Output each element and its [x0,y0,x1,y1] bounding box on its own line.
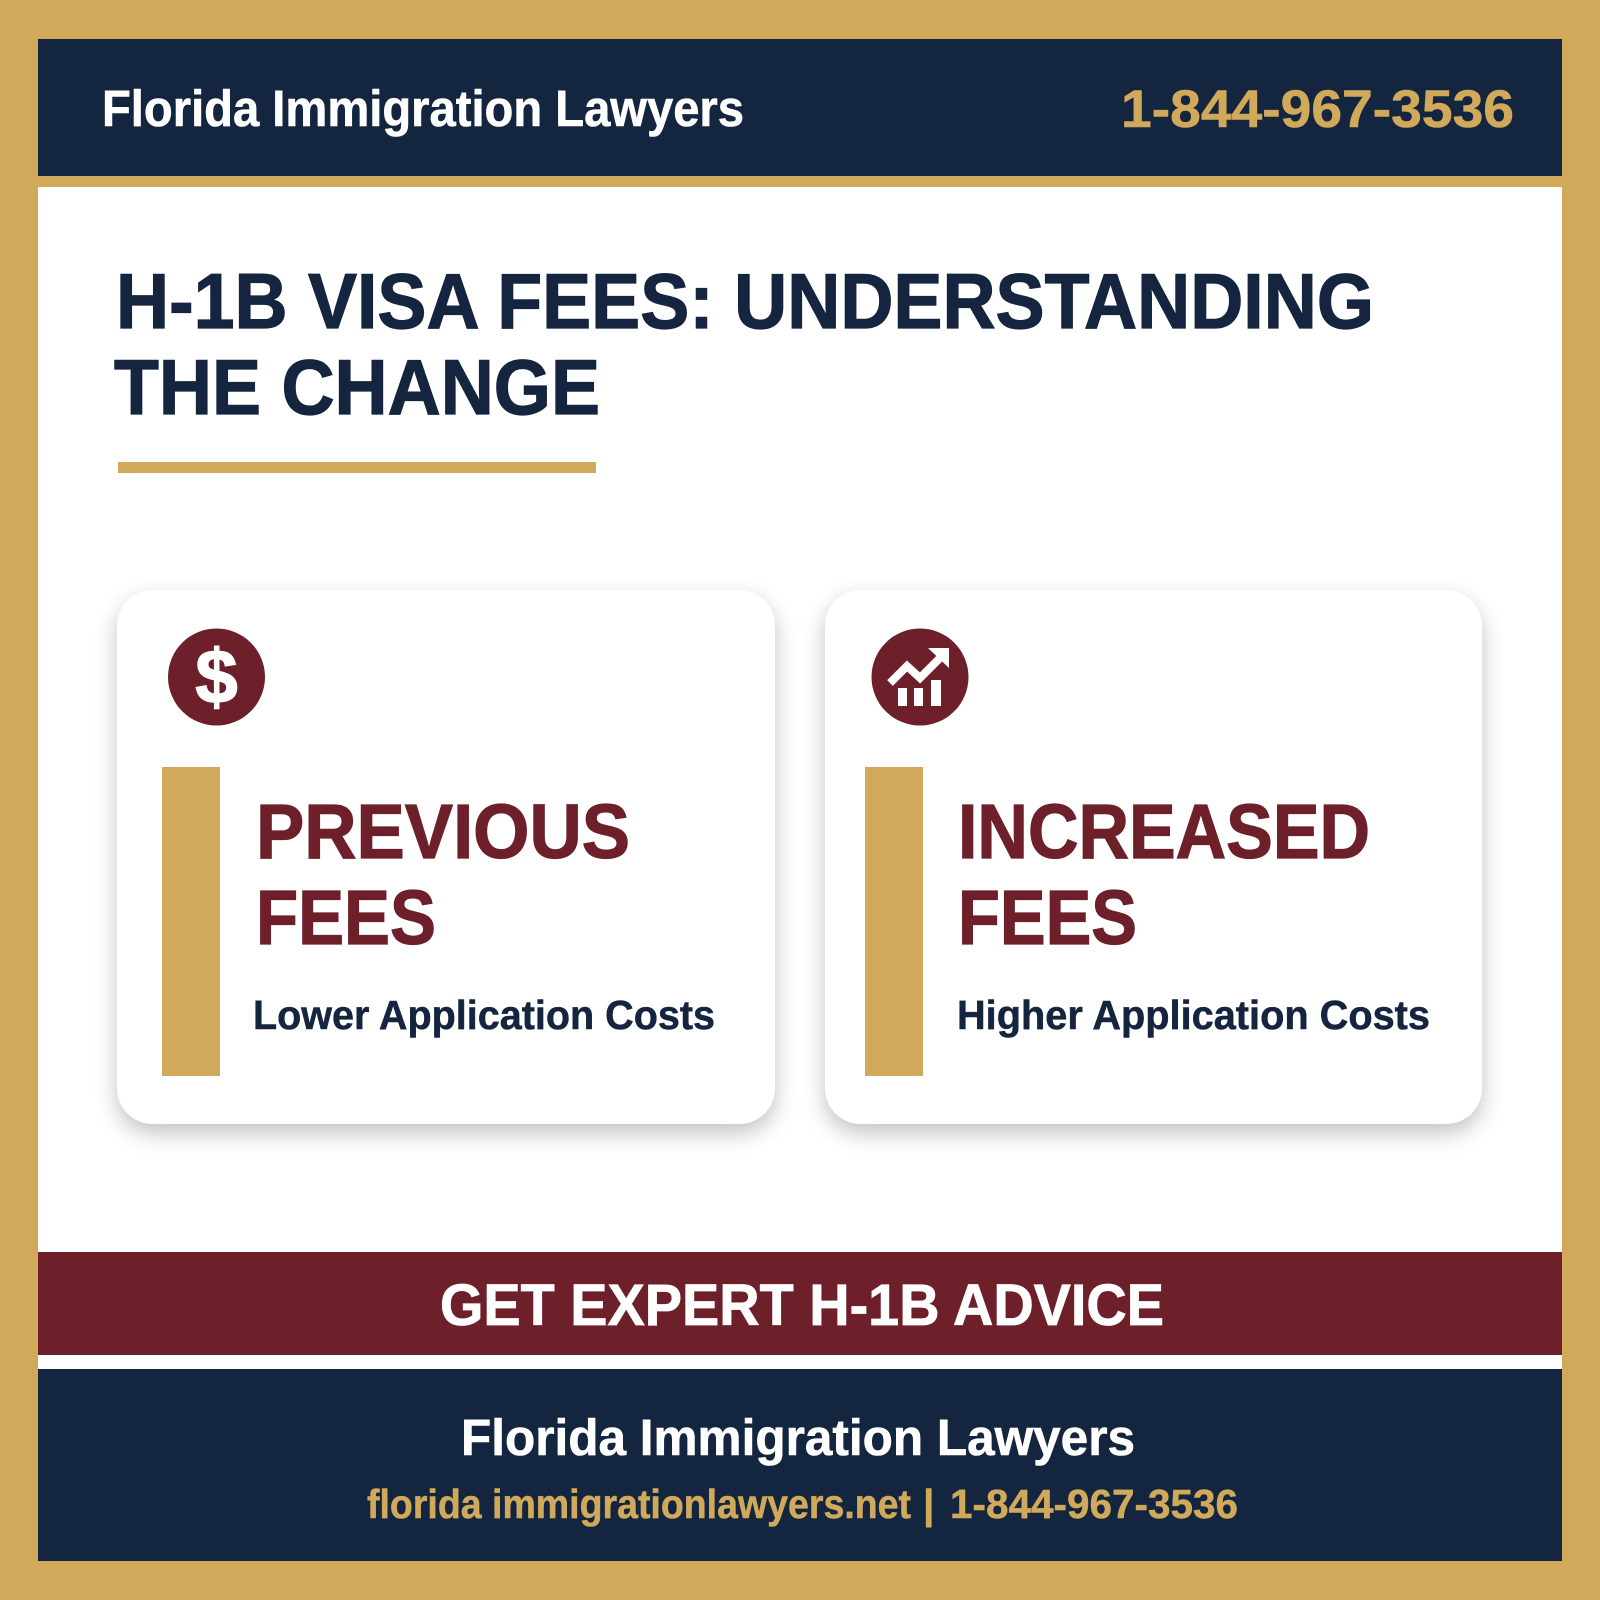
content background [38,187,1562,1369]
card subtitle: Lower Application Costs [253,992,715,1038]
title: H-1B VISA FEES: UNDERSTANDING [116,257,1374,345]
icon: dollar: $ [195,635,238,720]
header phone number: 1-844-967-3536 [1121,80,1514,139]
call to action banner [38,1252,1562,1355]
card heading [958,789,1370,961]
card heading: FEES [256,875,436,961]
icon: dollar [168,628,265,726]
footer contact line [367,1481,1238,1527]
panel: increased fees [825,590,1482,1124]
title [114,257,1374,431]
call to action banner: GET EXPERT H-1B ADVICE [440,1273,1164,1338]
footer contact line: | [923,1481,934,1527]
header firm name: Florida Immigration Lawyers [102,80,744,137]
card heading: PREVIOUS [256,789,630,875]
icon: rising chart [872,628,968,726]
gold accent bar [162,767,220,1076]
card heading: FEES [958,875,1137,961]
card subtitle: Higher Application Costs [957,992,1430,1038]
footer contact line: florida immigrationlawyers.net [367,1481,911,1527]
header bar [38,39,1562,176]
title: THE CHANGE [114,343,600,431]
card heading: INCREASED [958,789,1370,875]
footer contact line: 1-844-967-3536 [950,1481,1238,1527]
footer firm name: Florida Immigration Lawyers [461,1409,1135,1466]
footer [38,1369,1562,1561]
card heading [256,789,630,961]
panel: previous fees [117,590,775,1124]
title underline [118,462,596,473]
gold accent bar [865,767,923,1076]
